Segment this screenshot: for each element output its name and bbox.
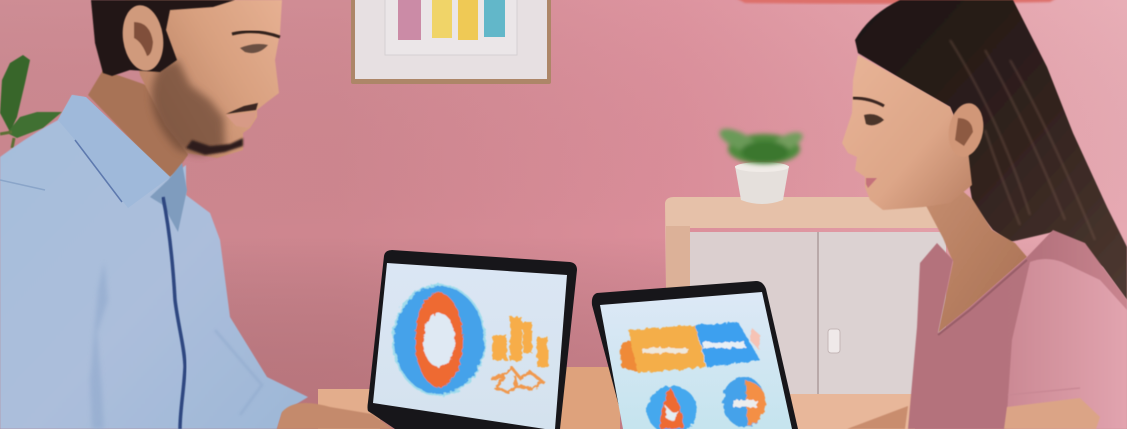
man: ear <box>119 3 167 73</box>
woman: face <box>842 55 972 210</box>
left chart: ring <box>392 284 486 396</box>
man: eye and brow <box>232 32 280 53</box>
man: lips <box>226 112 256 128</box>
woman <box>842 0 1127 429</box>
woman: neck <box>923 180 1027 333</box>
left chart: bars <box>493 317 548 367</box>
man: shirt <box>0 95 308 429</box>
man: hand <box>277 403 393 429</box>
laptop: left <box>368 250 577 429</box>
woman: hair <box>855 0 1127 300</box>
framed picture <box>351 0 551 84</box>
laptop: right <box>592 281 798 429</box>
desk <box>318 367 915 429</box>
woman: ear <box>945 100 987 160</box>
woman: eye and brow <box>853 98 884 125</box>
man: goatee <box>186 138 243 155</box>
man: moustache <box>226 103 258 114</box>
house plant leaves behind man <box>0 55 62 148</box>
right chart: circle two <box>723 377 766 427</box>
woman: hair strands <box>950 40 1095 240</box>
woman: shirt <box>908 230 1127 429</box>
left chart: network <box>491 368 543 392</box>
man: face <box>125 0 282 158</box>
right chart: circle one <box>647 386 697 429</box>
red wall shelf <box>732 0 1060 4</box>
white cabinet <box>665 197 946 396</box>
right chart: horizontal bar <box>620 322 761 373</box>
left screen <box>373 263 567 429</box>
right screen <box>600 292 792 429</box>
man: neck <box>88 70 188 180</box>
woman: forearm <box>847 406 908 429</box>
man: hair <box>91 0 235 76</box>
man <box>0 0 308 429</box>
man: stubble <box>152 60 225 155</box>
woman: lips <box>866 178 877 188</box>
woman: arm <box>1004 398 1100 429</box>
potted plant <box>716 124 805 204</box>
